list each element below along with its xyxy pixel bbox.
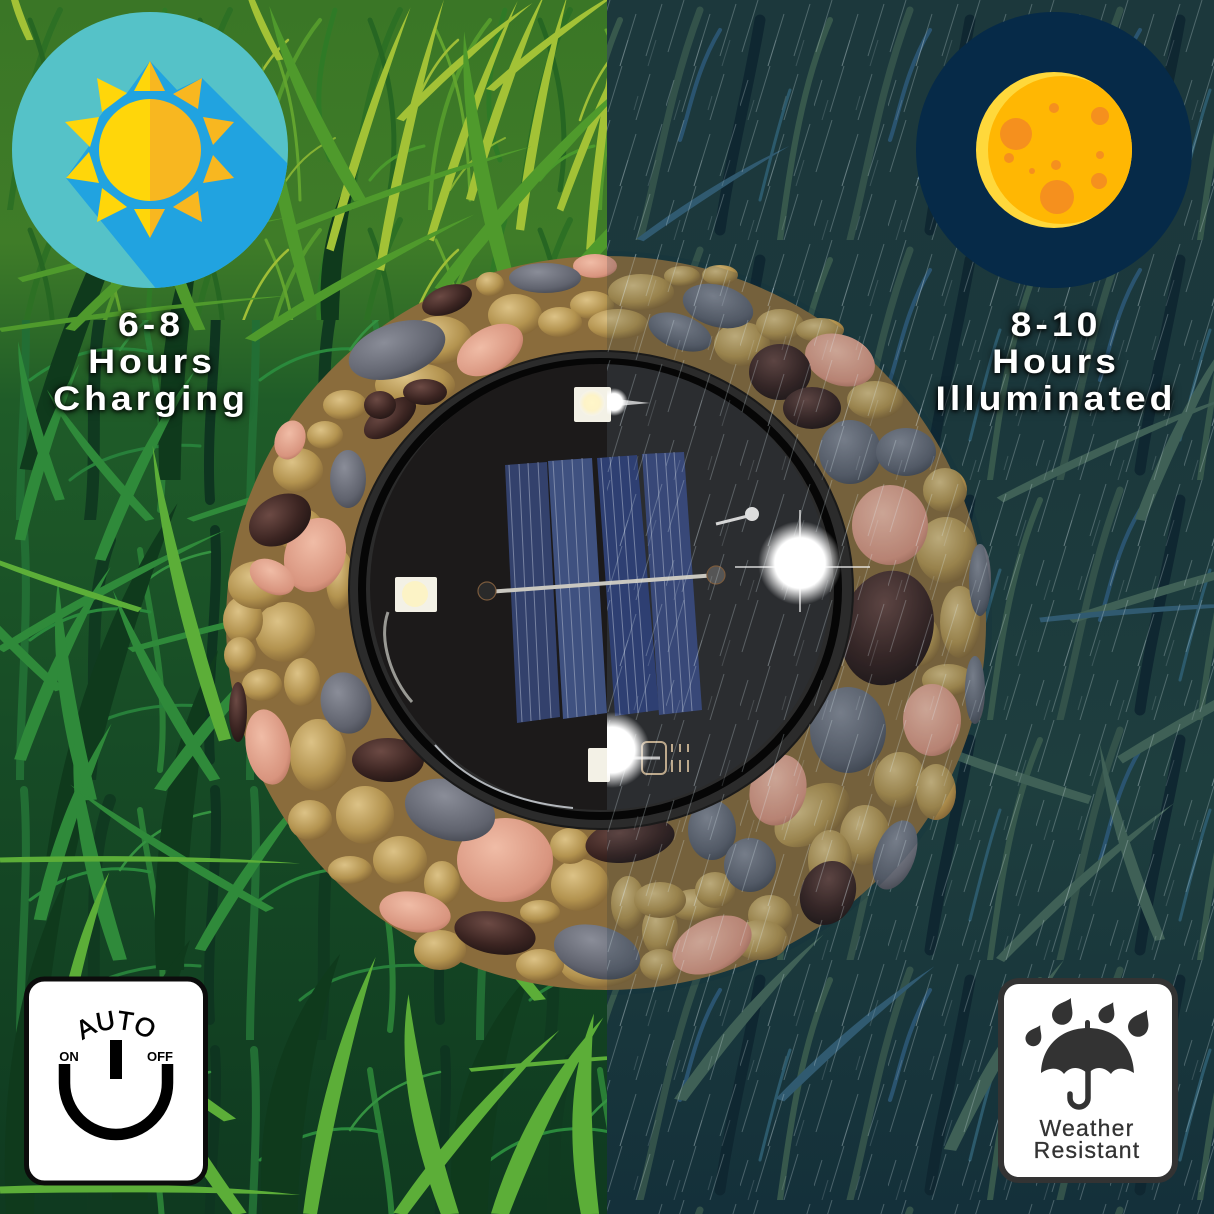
- caption: charging hours: 6-8: [118, 306, 184, 344]
- badge: weather resistant: Weather: [1040, 1115, 1134, 1141]
- caption: charging hours: Hours: [88, 343, 216, 381]
- small switch contact: [716, 516, 748, 524]
- switch solder blob: [745, 507, 759, 521]
- badge: auto on off: AUTO: [80, 1010, 154, 1040]
- badge: auto on off: [24, 976, 208, 1186]
- black rim: [349, 351, 853, 829]
- rim inner band: [362, 362, 838, 816]
- solder point left: [478, 582, 496, 600]
- rim reflection: [435, 745, 573, 808]
- glow bottom LED: [607, 712, 660, 788]
- badge: auto on off: OFF: [147, 1049, 173, 1064]
- glow top LED: [607, 388, 650, 416]
- badge: auto on off: ON: [59, 1049, 79, 1064]
- ring base: [226, 256, 986, 990]
- tan pebbles: [223, 265, 980, 987]
- solder wire: [487, 575, 717, 592]
- icon: moon badge: [916, 12, 1192, 288]
- icon: sun badge: [12, 12, 300, 300]
- wire to left LED: [385, 612, 412, 702]
- LED top: [574, 387, 611, 422]
- background: rainy night grass: [607, 0, 1214, 1214]
- caption: illuminated hours: Hours: [992, 343, 1120, 381]
- caption: illuminated hours: 8-10: [1011, 306, 1101, 344]
- rain over lens: [607, 254, 988, 994]
- circuit contacts: [642, 742, 688, 774]
- badge: weather resistant: Resistant: [1034, 1137, 1140, 1163]
- solar panel: [478, 452, 725, 723]
- caption: illuminated hours: [936, 306, 1176, 418]
- caption: illuminated hours: Illuminated: [936, 380, 1176, 418]
- LED left: [395, 577, 437, 612]
- LED bottom: [588, 748, 610, 782]
- dark pebbles: [229, 278, 946, 961]
- pink pebbles: [240, 254, 961, 986]
- solar light lens: [348, 254, 988, 994]
- stone ring: [223, 254, 991, 990]
- icon: umbrella: [1023, 993, 1156, 1107]
- background: sunny grass: [0, 0, 607, 1214]
- caption: charging hours: [53, 306, 249, 418]
- inner disk left half: [370, 364, 607, 810]
- badge: weather resistant: [1001, 981, 1175, 1180]
- inner disk right half: [607, 364, 745, 414]
- dim overlay: rainy half of ring: [607, 254, 990, 990]
- glow right LED: [735, 510, 870, 612]
- solder point right: [707, 566, 725, 584]
- gray pebbles: [314, 263, 991, 989]
- caption: charging hours: Charging: [53, 380, 249, 418]
